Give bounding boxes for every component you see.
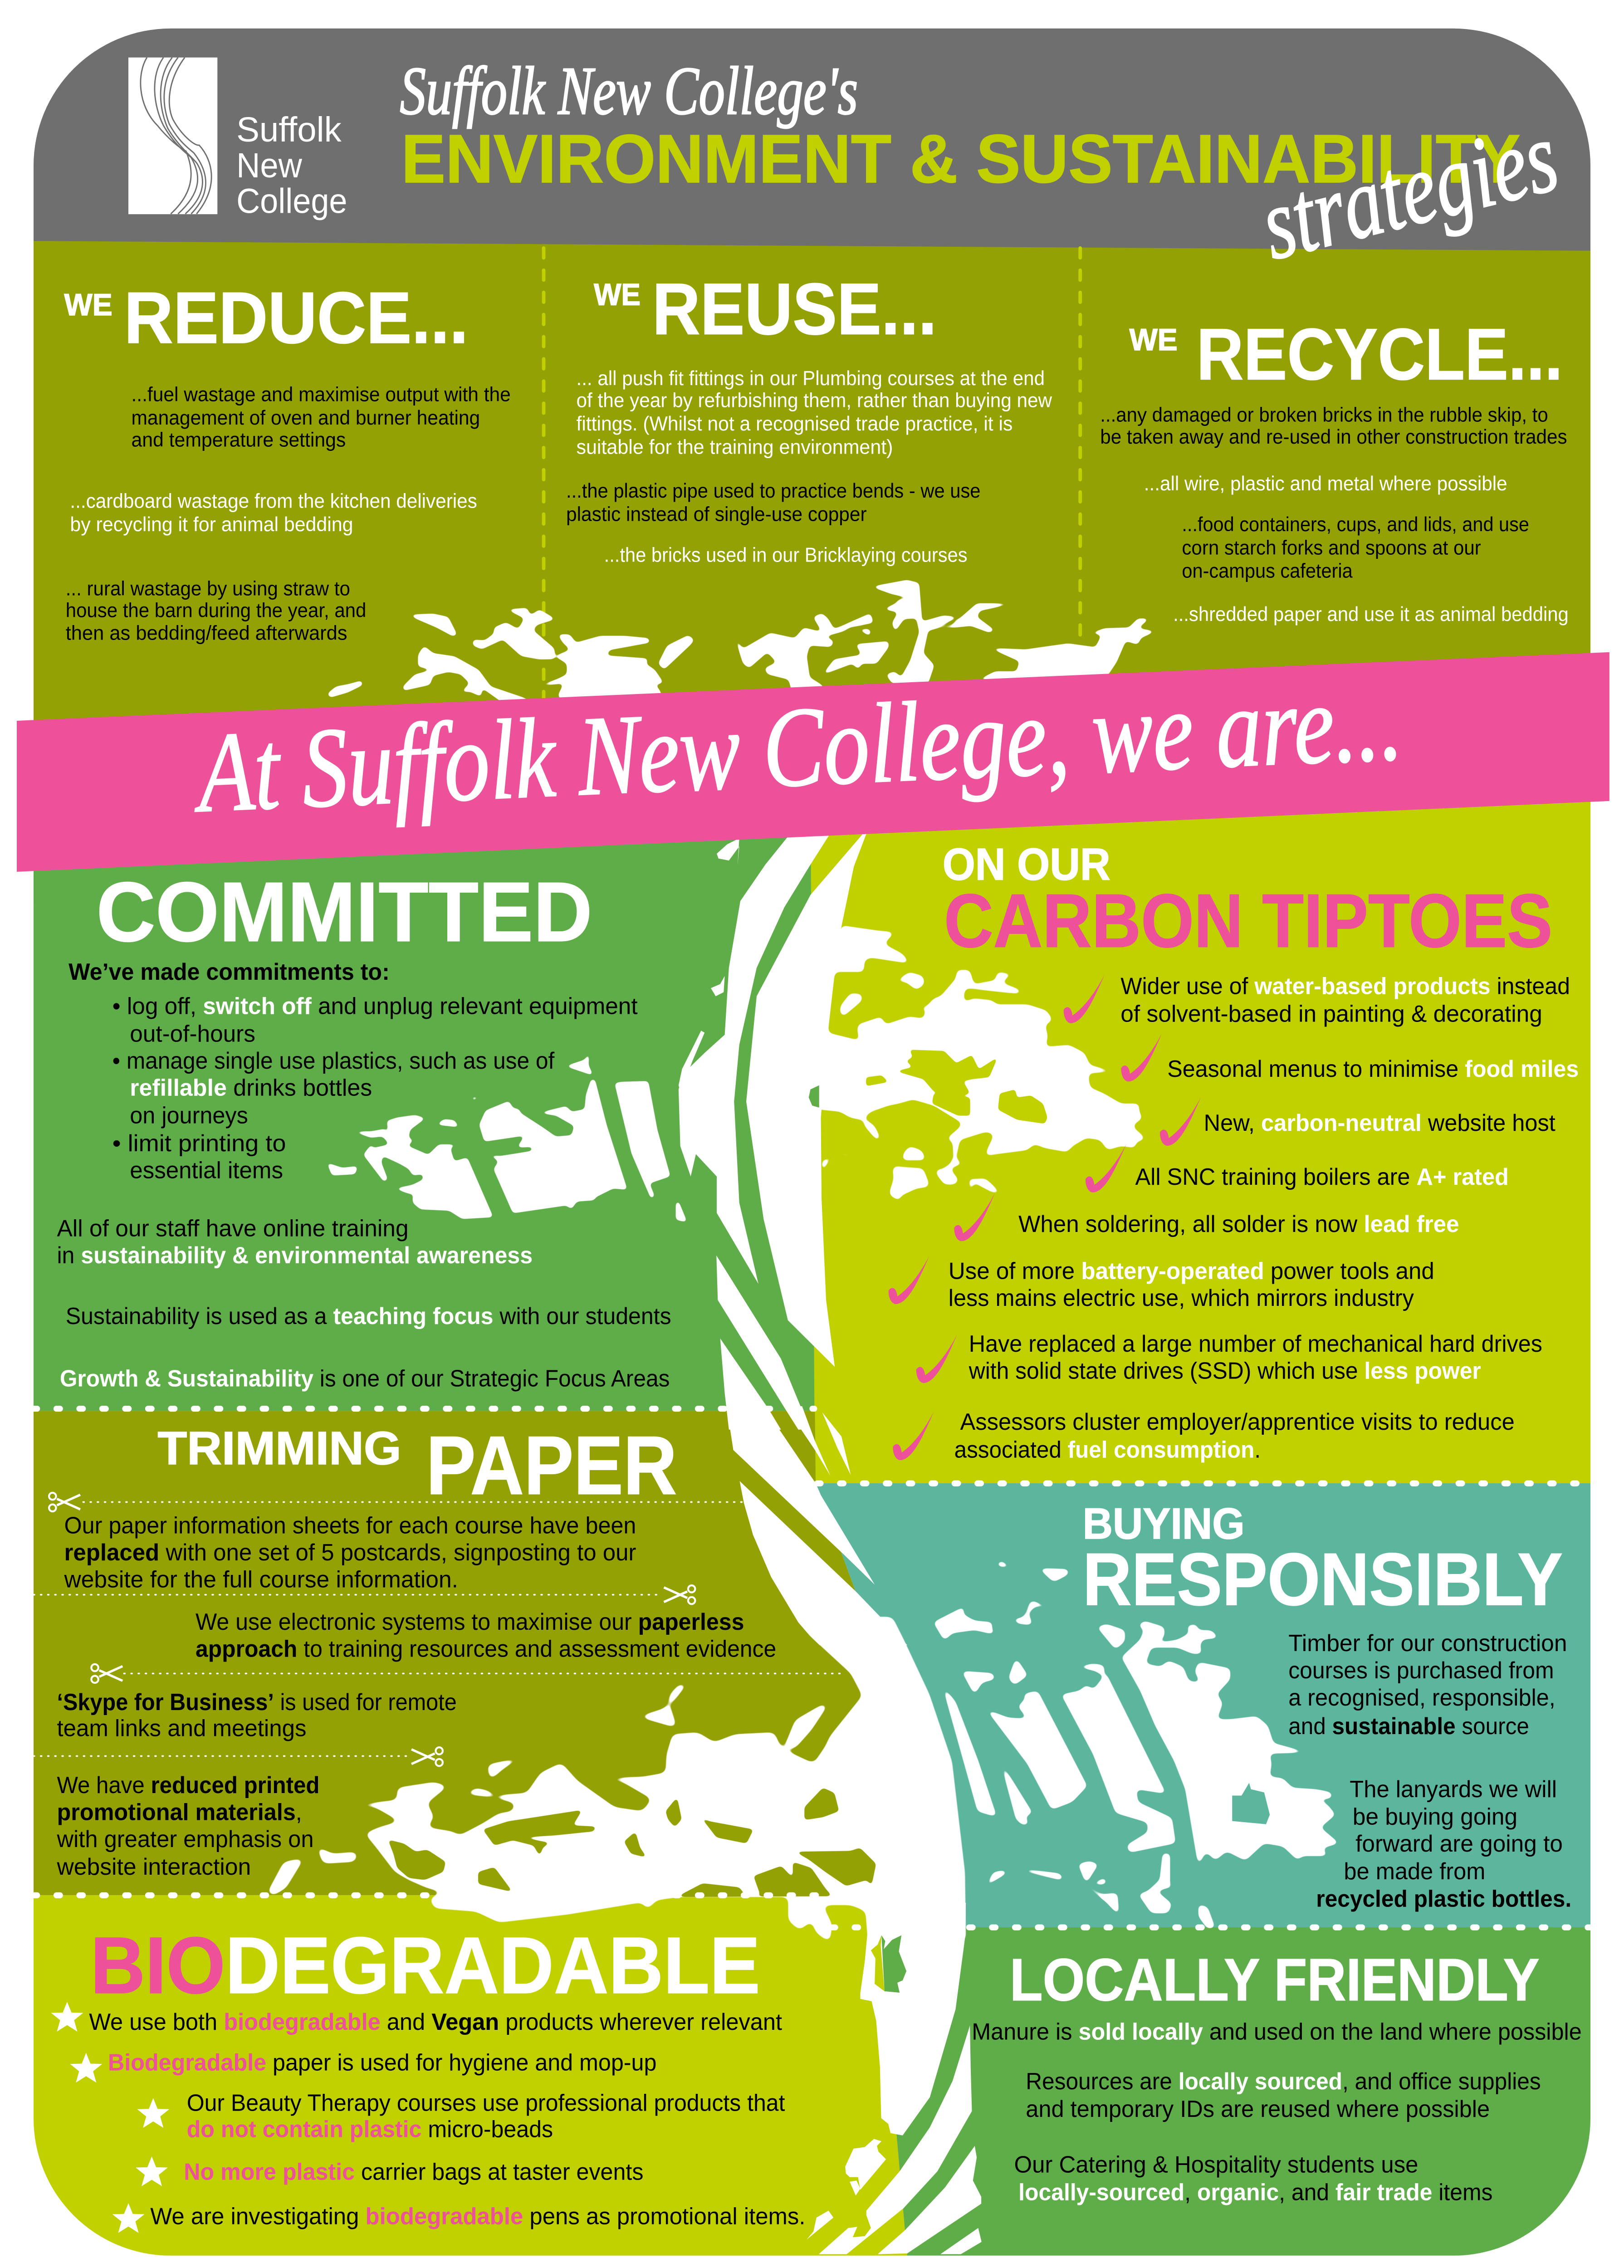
panel: committed — [57, 865, 671, 1392]
panel: trimming paper — [56, 1419, 776, 1880]
panel: on our carbon tiptoes: Use of more battery-operated power tools and — [949, 1258, 1434, 1285]
tree trunk and branches upper section — [679, 830, 868, 1430]
pink banner — [17, 652, 1609, 872]
panel: we reuse: of the year by refurbishing them, rather than buying new — [577, 389, 1052, 411]
panel: buying responsibly: forward are going to — [1355, 1831, 1563, 1857]
panel: we recycle: ...food containers, cups, and lids, and use — [1182, 513, 1529, 536]
panel: trimming paper: replaced with one set of 5 postcards, signposting to our — [64, 1540, 636, 1566]
panel: on our carbon tiptoes: Wider use of water-based products instead — [1120, 973, 1570, 1000]
panel: buying responsibly: BUYING — [1083, 1500, 1245, 1548]
panel: on our carbon tiptoes: New, carbon-neutral website host — [1204, 1110, 1556, 1136]
panel: trimming paper olive background — [0, 1411, 878, 1895]
panel: we reuse: WE — [594, 278, 641, 312]
panel: committed: Growth & Sustainability is one of our Strategic Focus Areas — [60, 1366, 670, 1392]
panel: on our carbon tiptoes: with solid state drives (SSD) which use less power — [969, 1358, 1481, 1384]
panel: buying responsibly — [1083, 1500, 1571, 1912]
panel: we recycle: ...any damaged or broken bricks in the rubble skip, to — [1100, 404, 1548, 426]
panel: committed: All of our staff have online training — [57, 1215, 409, 1242]
panel: buying responsibly: recycled plastic bottles. — [1316, 1886, 1571, 1912]
panel: we reduce: ... rural wastage by using straw to — [66, 577, 350, 600]
panel: committed: essential items — [130, 1157, 283, 1183]
panel: buying responsibly: be buying going — [1353, 1804, 1517, 1830]
panel: trimming paper: approach to training resources and assessment evidence — [196, 1636, 776, 1662]
logo: New — [236, 146, 302, 185]
panel: trimming paper: promotional materials, — [57, 1799, 302, 1826]
panel: we reuse: fittings. (Whilst not a recognised trade practice, it is — [577, 413, 1013, 435]
panel: locally friendly: LOCALLY FRIENDLY — [1010, 1946, 1539, 2013]
panel: on our carbon tiptoes: ON OUR — [943, 840, 1110, 890]
panel: on our carbon tiptoes: Seasonal menus to minimise food miles — [1167, 1056, 1579, 1082]
panel: trimming paper: website interaction — [56, 1854, 251, 1880]
tree wedges crossing the paper panel — [727, 1406, 907, 1645]
panel: we reuse: REUSE... — [652, 269, 937, 350]
title: Suffolk New College's — [400, 53, 858, 129]
panel: locally friendly: locally-sourced, organic, and fair trade items — [1018, 2180, 1493, 2206]
panel: we reuse: ...the plastic pipe used to practice bends - we use — [566, 480, 981, 502]
tree foliage above the banner — [327, 580, 1156, 703]
panel: on our carbon tiptoes — [943, 840, 1579, 1463]
panel: trimming paper: Our paper information sheets for each course have been — [64, 1513, 636, 1539]
panel: trimming paper: with greater emphasis on — [56, 1826, 314, 1853]
panel: we reduce: REDUCE... — [124, 277, 469, 359]
panel: trimming paper: We have reduced printed — [57, 1772, 319, 1799]
panel: buying responsibly: RESPONSIBLY — [1083, 1537, 1563, 1621]
tree trunk base and roots — [807, 1903, 982, 2254]
panel: we reduce: management of oven and burner heating — [131, 407, 480, 429]
panel: committed: COMMITTED — [96, 865, 592, 959]
panel: on our carbon tiptoes: CARBON TIPTOES — [944, 879, 1552, 963]
panel: biodegradable: We are investigating biodegradable pens as promotional items. — [150, 2204, 806, 2230]
panel: we reduce: by recycling it for animal bedding — [70, 513, 353, 536]
lime gaps in the carbon tiptoes canopy — [866, 1050, 1047, 1124]
panel: we reduce: ...cardboard wastage from the kitchen deliveries — [70, 490, 477, 512]
panel: trimming paper: website for the full course information. — [64, 1567, 458, 1593]
panel: we reduce: and temperature settings — [131, 429, 346, 451]
panel: locally friendly: Manure is sold locally and used on the land where possible — [972, 2019, 1582, 2045]
panel: we recycle: corn starch forks and spoons at our — [1182, 537, 1481, 559]
panel: we reuse: ...the bricks used in our Bricklaying courses — [604, 544, 968, 566]
panel: locally friendly: and temporary IDs are reused where possible — [1026, 2096, 1490, 2122]
panel: biodegradable: do not contain plastic micro-beads — [187, 2116, 553, 2143]
panel: we recycle: be taken away and re-used in other construction trades — [1100, 426, 1567, 448]
panel: buying responsibly: be made from — [1344, 1858, 1485, 1885]
panel: reduce reuse recycle olive background — [0, 241, 1624, 904]
panel: trimming paper: team links and meetings — [57, 1716, 306, 1742]
panel: we reuse: ... all push fit fittings in our Plumbing courses at the end — [577, 367, 1045, 390]
panel: buying responsibly: and sustainable source — [1288, 1713, 1529, 1740]
panel: biodegradable: Biodegradable paper is used for hygiene and mop-up — [108, 2049, 656, 2076]
panel: carbon tiptoes lime background — [810, 788, 1624, 1484]
panel: we recycle: ...all wire, plastic and metal where possible — [1144, 473, 1507, 495]
panel: buying responsibly: The lanyards we will — [1350, 1776, 1557, 1803]
panel: buying responsibly: Timber for our construction — [1288, 1630, 1567, 1657]
panel: biodegradable: Our Beauty Therapy courses use professional products that — [187, 2090, 785, 2116]
panel: committed: Sustainability is used as a teaching focus with our students — [66, 1303, 671, 1330]
panel: grey header background — [34, 28, 1590, 251]
teal gap in the right foliage — [1232, 1783, 1270, 1824]
panel: we reuse: suitable for the training environment) — [577, 436, 893, 458]
logo: Suffolk — [236, 110, 342, 149]
panel: we recycle: RECYCLE... — [1197, 313, 1563, 395]
panel: committed: in sustainability & environmental awareness — [57, 1242, 533, 1269]
panel: we recycle: WE — [1130, 323, 1178, 357]
panel: on our carbon tiptoes: Assessors cluster employer/apprentice visits to reduce — [960, 1409, 1515, 1435]
panel: committed: • limit printing to — [113, 1130, 286, 1157]
logo — [128, 58, 347, 221]
panel: we reduce: then as bedding/feed afterwards — [66, 622, 347, 644]
panel: we reduce: house the barn during the year, and — [66, 600, 366, 622]
title: ENVIRONMENT & SUSTAINABILITY — [401, 121, 1521, 197]
panel: on our carbon tiptoes: less mains electric use, which mirrors industry — [949, 1285, 1414, 1311]
icons: pink check marks — [889, 975, 1201, 1460]
panel: trimming paper: ‘Skype for Business’ is used for remote — [57, 1689, 457, 1716]
panel: biodegradable — [89, 1921, 806, 2230]
olive gaps in the paper panel canopy — [388, 1788, 876, 1897]
panel: biodegradable lime background — [0, 1895, 907, 2256]
panel: biodegradable: No more plastic carrier bags at taster events — [184, 2159, 643, 2185]
icons: scissors — [49, 1493, 695, 1766]
icons: white stars — [51, 2002, 169, 2233]
tree canopy on the carbon tiptoes panel — [809, 925, 1147, 1203]
panel: committed: refillable drinks bottles — [130, 1075, 372, 1101]
panel: locally friendly green background — [878, 1927, 1590, 2256]
panel: buying responsibly teal background — [816, 1483, 1624, 1927]
panel: on our carbon tiptoes: of solvent-based in painting & decorating — [1120, 1001, 1542, 1027]
tree canopy on the paper panel and trunk — [268, 1617, 966, 1943]
tree canopy on the committed panel — [327, 1051, 687, 1222]
panel: we reduce: WE — [64, 288, 113, 322]
panel: trimming paper: We use electronic systems to maximise our paperless — [196, 1609, 744, 1635]
title — [400, 53, 1568, 281]
panel: committed green background — [34, 837, 815, 1411]
panel: locally friendly: Resources are locally sourced, and office supplies — [1026, 2068, 1541, 2095]
panel: we reduce — [64, 277, 511, 644]
panel: on our carbon tiptoes: When soldering, all solder is now lead free — [1018, 1211, 1459, 1237]
panel: on our carbon tiptoes: Have replaced a large number of mechanical hard drives — [969, 1331, 1542, 1357]
panel: buying responsibly: a recognised, responsible, — [1288, 1685, 1556, 1711]
panel: biodegradable: BIODEGRADABLE — [90, 1921, 760, 2010]
panel: we reuse: plastic instead of single-use copper — [566, 503, 867, 525]
panel: we recycle: on-campus cafeteria — [1182, 560, 1353, 582]
panel: we reuse — [566, 269, 1052, 566]
panel: trimming paper: PAPER — [426, 1419, 677, 1512]
panel: committed: • log off, switch off and unplug relevant equipment — [113, 993, 638, 1020]
panel: we recycle: ...shredded paper and use it as animal bedding — [1173, 603, 1569, 626]
panel: on our carbon tiptoes: All SNC training boilers are A+ rated — [1135, 1164, 1509, 1190]
panel: locally friendly — [972, 1946, 1582, 2206]
logo: College — [236, 182, 347, 221]
panel: committed: out-of-hours — [130, 1021, 255, 1047]
panel: committed: • manage single use plastics, such as use of — [113, 1048, 555, 1074]
tree branches on the buying responsibly panel — [933, 1560, 1340, 1929]
panel: we recycle — [1100, 313, 1569, 626]
green gap in the trunk — [809, 1085, 819, 1108]
panel: locally friendly: Our Catering & Hospitality students use — [1014, 2151, 1418, 2178]
panel: we reduce: ...fuel wastage and maximise output with the — [131, 384, 511, 406]
panel: committed: on journeys — [130, 1103, 248, 1129]
panel: on our carbon tiptoes: associated fuel consumption. — [954, 1437, 1261, 1463]
panel: biodegradable: We use both biodegradable and Vegan products wherever relevant — [89, 2009, 783, 2035]
panel: trimming paper: TRIMMING — [157, 1422, 401, 1474]
panel: buying responsibly: courses is purchased from — [1288, 1657, 1554, 1684]
panel: committed: We’ve made commitments to: — [68, 959, 390, 985]
